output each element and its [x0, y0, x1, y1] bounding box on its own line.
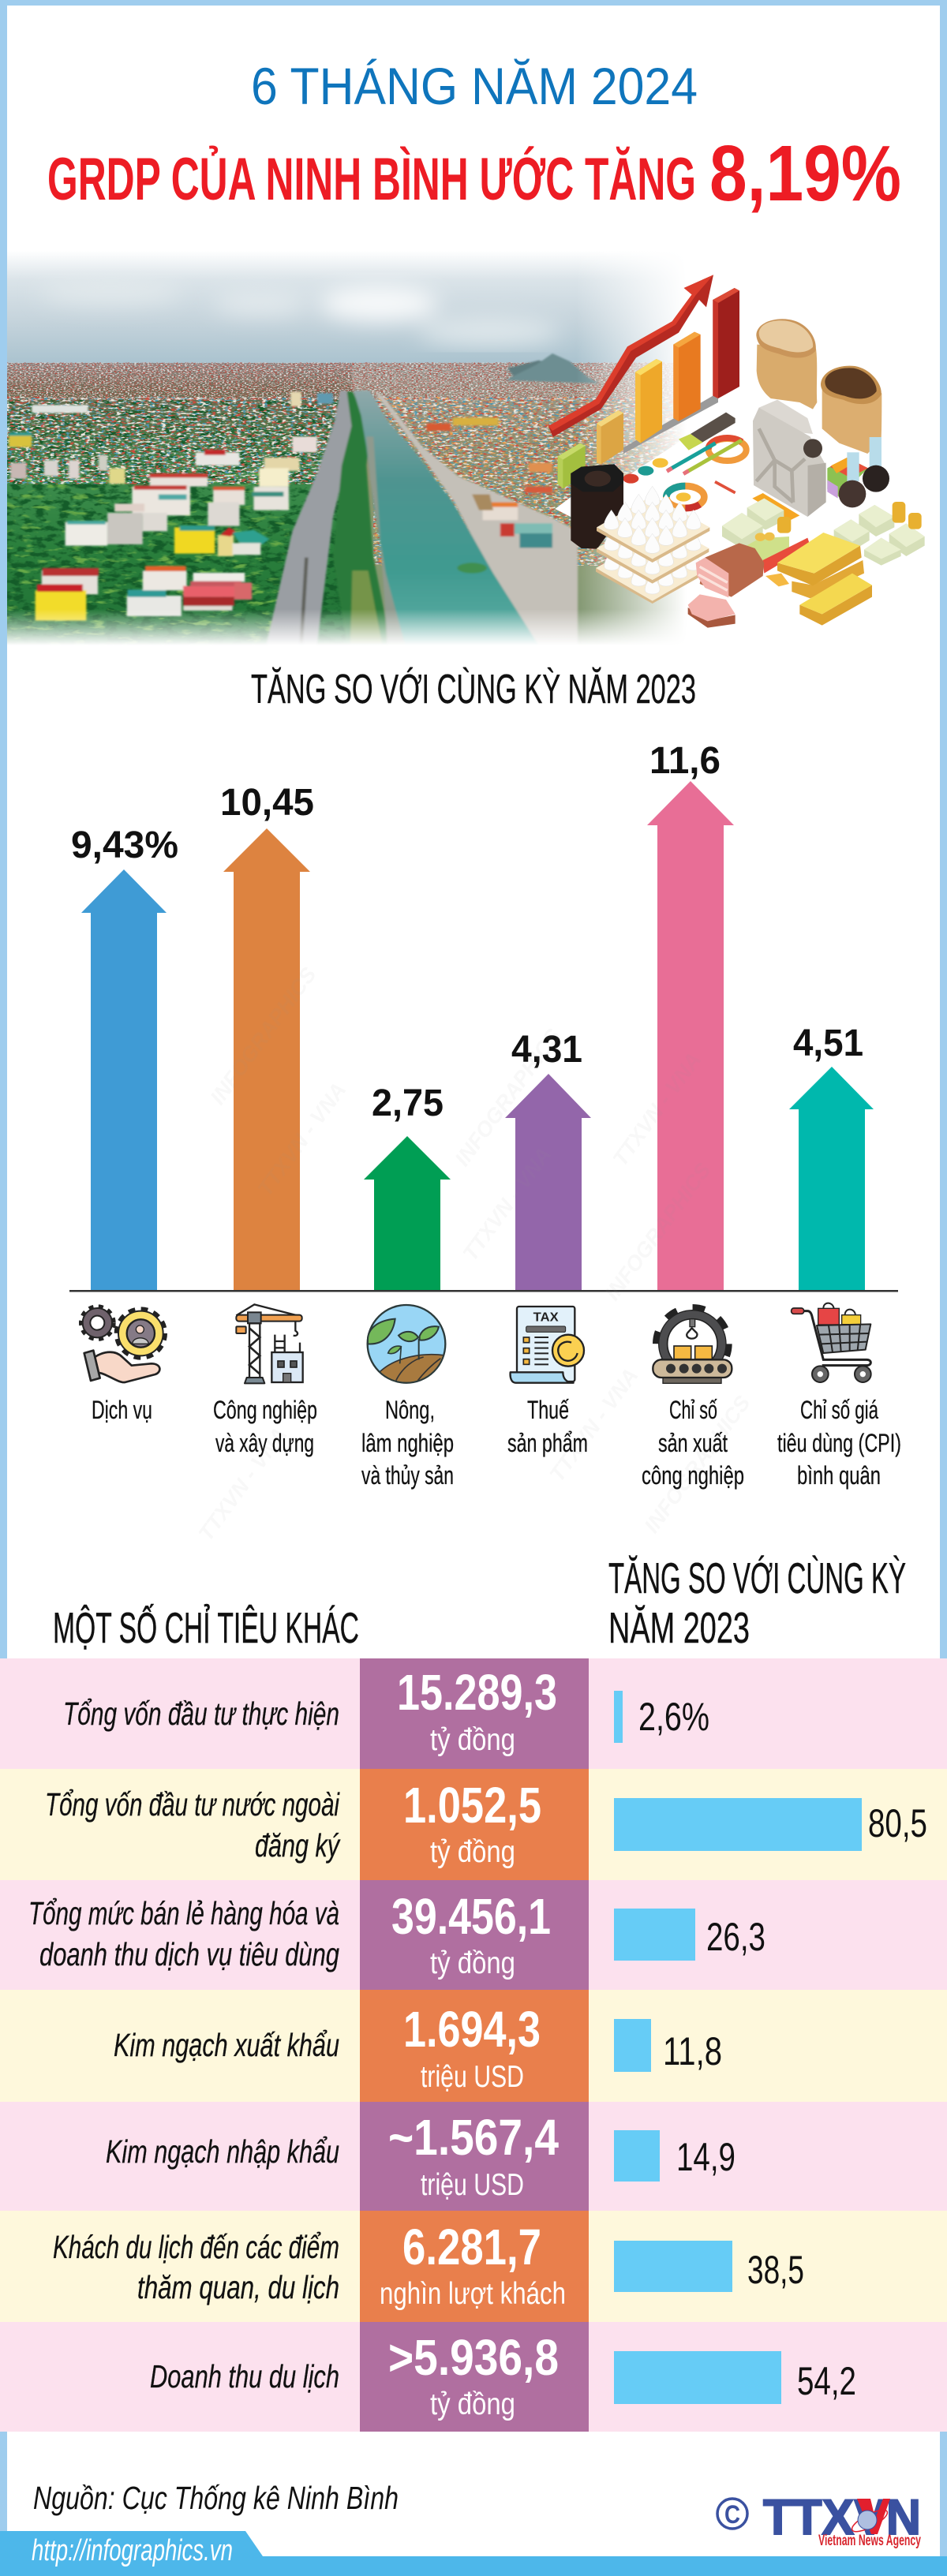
row: tourist arrivals: 6.281,7 [402, 2219, 541, 2275]
row: registered foreign investment [0, 1769, 947, 1880]
sector labels: Công nghiệp [213, 1396, 317, 1424]
table: other indicators [0, 1658, 947, 2432]
row: tourism revenue: >5.936,8 [388, 2329, 559, 2386]
growth bars [558, 288, 739, 488]
icon: industrial production gear and conveyor [653, 1307, 732, 1383]
row: retail sales and consumer services: 26,3 [706, 1915, 765, 1959]
row: registered foreign investment: đăng ký [255, 1827, 341, 1864]
arrow chart: growth by sector [69, 740, 898, 1292]
arrow: industrial production index 11,6 [647, 781, 734, 1290]
sector labels: Dịch vụ [92, 1396, 152, 1424]
sector labels: và thủy sản [361, 1461, 454, 1490]
row: tourism revenue: tỷ đồng [430, 2387, 515, 2421]
row: total realised investment: Tổng vốn đầu tư thực hiện [63, 1696, 339, 1732]
watermarks: TTXVN - VNA [194, 1423, 291, 1546]
row: tourism revenue: Doanh thu du lịch [150, 2358, 339, 2395]
sector labels: lâm nghiệp [361, 1429, 454, 1457]
heading: growth column: NĂM 2023 [608, 1603, 750, 1652]
row: retail sales and consumer services: 39.456,1 [391, 1888, 551, 1945]
watermarks: TTXVN - VNA [459, 1143, 556, 1266]
value labels: 4,51 [793, 1023, 863, 1064]
watermarks: INFOGRAPHICS [640, 1391, 755, 1538]
row: imports: triệu USD [421, 2168, 524, 2202]
row: imports: ~1.567,4 [388, 2109, 559, 2166]
row: exports [0, 1990, 947, 2102]
row: exports: triệu USD [421, 2060, 524, 2094]
row: imports: Kim ngạch nhập khẩu [106, 2133, 339, 2170]
icon: shopping cart [792, 1303, 871, 1382]
watermarks: INFOGRAPHICS [206, 963, 321, 1109]
row: registered foreign investment: Tổng vốn đầu tư nước ngoài [45, 1786, 340, 1823]
value labels: 2,75 [372, 1082, 444, 1124]
row: total realised investment: 15.289,3 [397, 1664, 557, 1721]
sector labels: Nông, [385, 1396, 435, 1424]
value labels: 10,45 [220, 782, 314, 824]
arrow: CPI 4,51 [789, 1067, 874, 1290]
value labels: 11,6 [649, 740, 721, 782]
section heading: growth versus 2023: TĂNG SO VỚI CÙNG KỲ NĂM 2023 [251, 667, 696, 712]
source note: Nguồn: Cục Thống kê Ninh Bình [33, 2480, 399, 2516]
row: registered foreign investment: 1.052,5 [403, 1777, 541, 1834]
row: tourist arrivals: thăm quan, du lịch [137, 2269, 339, 2305]
title: period: 6 THÁNG NĂM 2024 [251, 57, 698, 115]
title: highlighted figure: 8,19% [709, 129, 901, 218]
footer band with website [0, 2531, 947, 2576]
sector labels: Thuế [527, 1396, 569, 1424]
row: tourism revenue [0, 2322, 947, 2432]
row: exports: 1.694,3 [403, 2001, 541, 2058]
heading: growth column [608, 1553, 906, 1652]
grain sacks [756, 319, 881, 454]
icon: tax document: TAX [533, 1311, 559, 1325]
row: total realised investment: 2,6% [638, 1695, 709, 1739]
egg trays [596, 486, 709, 604]
row: tourism revenue: 54,2 [797, 2359, 856, 2403]
sector labels: Chỉ số [669, 1396, 717, 1424]
chemical flasks [839, 437, 889, 507]
marker and pencils [667, 413, 742, 474]
watermarks: INFOGRAPHICS [601, 1158, 716, 1305]
sector labels: sản phẩm [507, 1429, 588, 1457]
row: exports: Kim ngạch xuất khẩu [114, 2027, 339, 2063]
arrow: services 9,43% [81, 869, 167, 1290]
row: imports: 14,9 [676, 2135, 736, 2179]
row: registered foreign investment: 80,5 [868, 1801, 927, 1845]
row: registered foreign investment: tỷ đồng [430, 1835, 515, 1869]
row: retail sales and consumer services: tỷ đồng [430, 1946, 515, 1980]
row: retail sales and consumer services [0, 1880, 947, 1990]
footer band with website: http://infographics.vn [32, 2534, 233, 2567]
row: retail sales and consumer services: Tổng mức bán lẻ hàng hóa và [28, 1895, 339, 1931]
sector labels: và xây dựng [215, 1429, 314, 1457]
distant mountain near horizon [505, 353, 600, 383]
icon: construction crane and building [236, 1304, 303, 1383]
gold bars [777, 533, 872, 626]
icon: seedling and field [368, 1305, 447, 1385]
row: exports: 11,8 [663, 2029, 722, 2073]
cured meat [688, 543, 764, 628]
illustration: isometric economic goods and growth chart [548, 275, 925, 628]
value labels: 9,43% [71, 824, 178, 866]
photo detail in source coordinates [7, 361, 705, 647]
row: tourist arrivals: 38,5 [747, 2248, 804, 2292]
watermarks: TTXVN - VNA [608, 1049, 706, 1171]
row: tourist arrivals: nghìn lượt khách [380, 2277, 566, 2311]
sector labels: sản xuất [658, 1429, 728, 1457]
icon: services [81, 1307, 165, 1382]
arrow: product tax 4,31 [505, 1074, 591, 1290]
sector labels: Chỉ số giá [800, 1396, 878, 1424]
watermarks: TTXVN - VNA [545, 1364, 642, 1486]
value labels [71, 740, 863, 1124]
banknote stacks and coins [722, 499, 925, 566]
jerry can [753, 400, 826, 517]
value labels: 4,31 [511, 1029, 582, 1071]
row: imports [0, 2102, 947, 2211]
black rubber column [571, 464, 623, 549]
growth arrow [548, 275, 713, 437]
sector labels: công nghiệp [642, 1461, 744, 1490]
arrow: industry and construction 10,45 [223, 828, 310, 1290]
row: total realised investment: tỷ đồng [430, 1723, 515, 1757]
watermarks [194, 963, 755, 1546]
row: tourist arrivals [0, 2211, 947, 2322]
sector labels: bình quân [797, 1461, 881, 1490]
sector labels [92, 1396, 901, 1490]
row: retail sales and consumer services: doanh thu dịch vụ tiêu dùng [39, 1936, 339, 1972]
paper charts [555, 397, 897, 614]
icon: tax document [511, 1307, 584, 1383]
logo: TTXVN Vietnam News Agency: TTXVN [763, 2490, 921, 2545]
watermarks: TTXVN - VNA [253, 1079, 350, 1201]
sector labels: tiêu dùng (CPI) [777, 1429, 901, 1457]
hero photo: Ninh Binh city with river [7, 251, 939, 647]
arrow: agriculture 2,75 [364, 1136, 451, 1290]
heading: other indicators: MỘT SỐ CHỈ TIÊU KHÁC [53, 1603, 359, 1652]
row: tourist arrivals: Khách du lịch đến các điểm [53, 2229, 339, 2265]
row: total realised investment [0, 1658, 947, 1769]
watermarks: INFOGRAPHICS [451, 1024, 566, 1171]
logo: TTXVN Vietnam News Agency: C [724, 2500, 740, 2529]
